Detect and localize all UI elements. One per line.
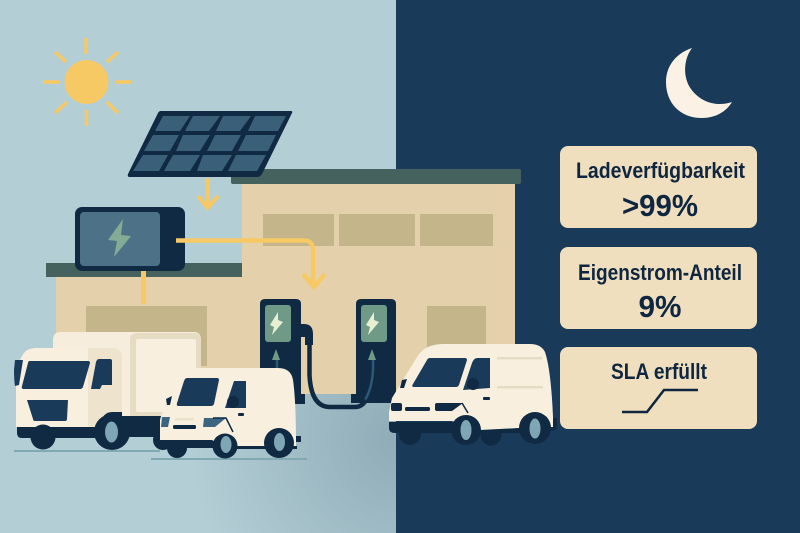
icon: solar panel <box>128 111 292 177</box>
label: Ladeverfügbarkeit <box>576 158 746 183</box>
background: day side <box>0 0 396 533</box>
vehicle: truck <box>14 332 201 451</box>
value: 9% <box>638 289 682 324</box>
label: SLA erfüllt <box>611 359 708 384</box>
charger: left <box>260 299 313 404</box>
label: Eigenstrom-Anteil <box>578 260 742 285</box>
building: right hall <box>231 169 521 394</box>
icon: step line <box>622 390 698 412</box>
building: left hall <box>46 263 242 394</box>
vehicle: small van <box>151 368 307 459</box>
arrow: panel to battery <box>198 178 218 208</box>
value: >99% <box>622 188 698 223</box>
arrow: battery to building feed <box>141 270 146 304</box>
charging cable <box>310 345 366 407</box>
panel: Eigenstrom-Anteil <box>560 247 757 329</box>
charger: right <box>351 299 396 403</box>
panel: Ladeverfügbarkeit <box>560 146 757 228</box>
background: night side <box>396 0 800 533</box>
arrow: battery to chargers <box>176 240 325 287</box>
icon: moon <box>666 48 732 118</box>
ground shadow <box>0 390 396 533</box>
icon: battery <box>75 207 185 271</box>
icon: sun <box>43 38 131 126</box>
panel: SLA erfüllt <box>560 347 757 429</box>
vehicle: large van <box>389 344 557 446</box>
